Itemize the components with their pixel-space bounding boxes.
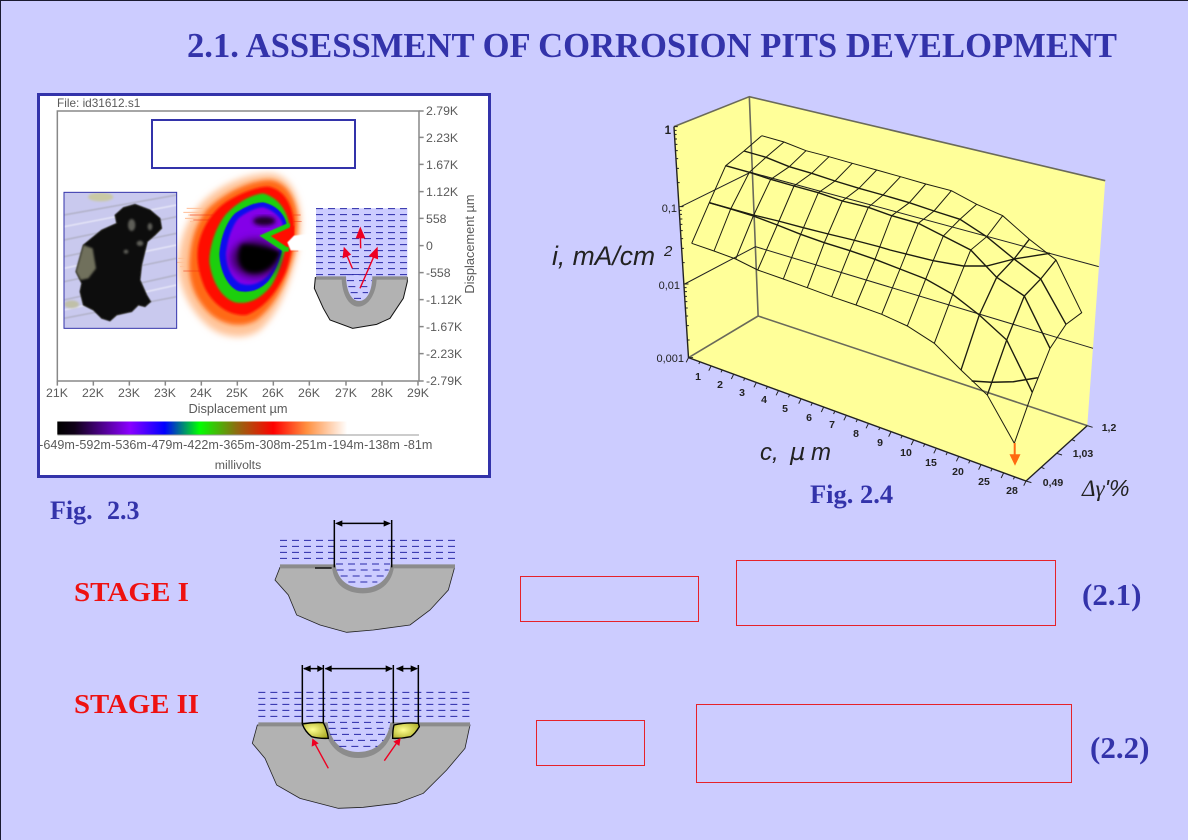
- c axis labels: 20: [952, 466, 964, 478]
- surface mesh: [692, 136, 1082, 443]
- y axis labels: 2.79K: [426, 104, 459, 118]
- y axis labels: -558: [426, 266, 451, 280]
- diagram: stage II pit: [252, 665, 470, 808]
- c axis labels: [695, 371, 1018, 497]
- x axis labels: 26K: [298, 386, 321, 400]
- colour scale labels: -308m: [255, 438, 291, 452]
- colour scale labels: -81m: [404, 438, 432, 452]
- value axis labels: 0,01: [659, 280, 680, 292]
- equation number 2.2: (2.2): [1090, 730, 1149, 765]
- axis title: crack depth: c,: [760, 439, 779, 466]
- photo of corrosion pit: [64, 192, 177, 328]
- colour scale unit: millivolts: [215, 458, 261, 472]
- formula placeholder 1 right: [736, 560, 1056, 626]
- c axis labels: 25: [978, 476, 990, 488]
- colour scale labels: -251m: [291, 438, 327, 452]
- strain axis labels: [1043, 422, 1116, 489]
- c axis labels: 6: [806, 412, 812, 424]
- chart: Fig 2.4 3D surface: [552, 97, 1129, 501]
- caption: Fig 2.3: Fig.: [50, 496, 93, 525]
- x axis labels: 26K: [262, 386, 285, 400]
- formula placeholder 1 left: [520, 576, 698, 622]
- value axis labels: 1: [665, 125, 672, 137]
- axis title: strain: Δγ'%: [1081, 475, 1129, 501]
- axis ticks: [674, 127, 1093, 486]
- c axis labels: 10: [900, 447, 912, 459]
- diagram: stage I pit: [275, 520, 455, 632]
- corrosion products, left: [302, 722, 328, 738]
- colour scale labels: -194m: [328, 438, 364, 452]
- y axis labels: -2.23K: [426, 347, 463, 361]
- c axis labels: 5: [782, 403, 788, 415]
- x axis labels: 23K: [118, 386, 141, 400]
- formula placeholder 2 left: [536, 720, 644, 766]
- c axis labels: 7: [829, 419, 835, 431]
- panel: Fig 2.3 potential map: [38, 94, 490, 476]
- strain axis labels: 0,49: [1043, 477, 1063, 489]
- colour scale labels: [39, 438, 432, 452]
- c axis labels: 2: [717, 379, 723, 391]
- c axis labels: 9: [877, 437, 883, 449]
- y axis labels: 558: [426, 212, 447, 226]
- colour scale labels: -365m: [219, 438, 255, 452]
- dimension arrows: [302, 665, 418, 723]
- x axis labels: 29K: [407, 386, 430, 400]
- y axis labels: 1.67K: [426, 158, 459, 172]
- x axis labels: 24K: [190, 386, 213, 400]
- caption: Fig 2.4: Fig. 2.4: [810, 479, 893, 509]
- label: stage II: STAGE II: [74, 688, 199, 719]
- orange arrow: [1010, 443, 1020, 466]
- axis title: crack depth: m: [811, 439, 831, 466]
- strain axis labels: 1,2: [1102, 422, 1116, 434]
- c axis labels: 1: [695, 371, 701, 383]
- caption: Fig 2.3: 2.3: [107, 496, 140, 525]
- axis title: current density: 2: [663, 243, 673, 260]
- formula placeholder 2 right: [696, 704, 1072, 782]
- value axis labels: 0,1: [662, 203, 677, 215]
- c axis labels: 28: [1006, 485, 1018, 497]
- x axis labels: 21K: [46, 386, 69, 400]
- potential heat map: [177, 173, 310, 337]
- y axis labels: 0: [426, 239, 433, 253]
- c axis labels: 8: [853, 428, 859, 440]
- y axis labels: -1.12K: [426, 293, 463, 307]
- colour scale labels: -422m: [183, 438, 219, 452]
- title: 2.1. ASSESSMENT OF CORROSION PITS DEVELOPMENT: [187, 26, 1117, 65]
- colour scale labels: -138m: [364, 438, 400, 452]
- small pit diagram with arrows: [314, 208, 407, 328]
- x axis title: Displacement µm: [188, 401, 288, 416]
- corrosion products, right: [393, 723, 419, 738]
- y axis title: Displacement µm: [462, 194, 477, 294]
- empty blue label box: [152, 120, 355, 168]
- chart walls: [674, 97, 1105, 481]
- colour scale bar: [57, 422, 347, 434]
- red arrows: [312, 738, 401, 768]
- y axis labels: [426, 104, 463, 388]
- axis title: current density: i, mA/cm: [552, 241, 655, 271]
- file label: File: id31612.s1: [57, 96, 140, 110]
- equation number 2.1: (2.1): [1082, 577, 1141, 612]
- c axis labels: 3: [739, 387, 745, 399]
- y axis labels: -1.67K: [426, 320, 463, 334]
- value axis labels: 0,001: [656, 353, 684, 365]
- x axis labels: 25K: [226, 386, 249, 400]
- x axis labels: 27K: [335, 386, 358, 400]
- colour scale labels: -536m: [111, 438, 147, 452]
- value axis labels: [656, 125, 684, 365]
- strain axis labels: 1,03: [1073, 448, 1093, 460]
- c axis labels: 4: [761, 394, 767, 406]
- plot frame with ticks: [57, 111, 424, 386]
- x axis labels: 22K: [82, 386, 105, 400]
- axis title: crack depth: µ: [789, 438, 805, 466]
- colour scale labels: -479m: [147, 438, 183, 452]
- x axis labels: 23K: [154, 386, 177, 400]
- dimension arrow: [334, 520, 392, 567]
- y axis labels: 2.23K: [426, 131, 459, 145]
- x axis labels: [46, 386, 430, 400]
- label: stage I: STAGE I: [74, 576, 189, 607]
- y axis labels: 1.12K: [426, 185, 459, 199]
- colour scale labels: -592m: [75, 438, 111, 452]
- c axis labels: 15: [925, 457, 937, 469]
- colour scale labels: -649m: [39, 438, 75, 452]
- y axis labels: -2.79K: [426, 374, 463, 388]
- x axis labels: 28K: [371, 386, 394, 400]
